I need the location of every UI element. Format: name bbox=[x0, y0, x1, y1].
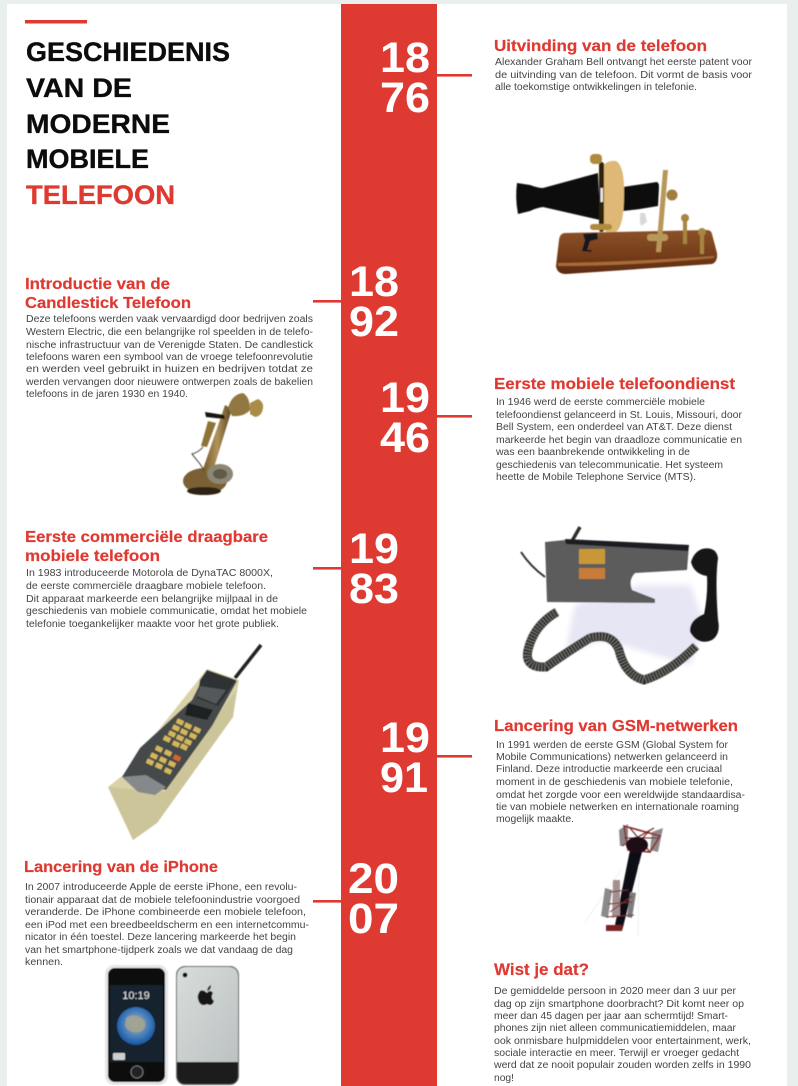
body wist je dat: werd dat ze nooit populair zouden worden zelfs in 1990 bbox=[493, 1060, 752, 1071]
heading 1876: Uitvinding van de telefoon bbox=[494, 38, 707, 55]
year 1983 bbox=[349, 525, 399, 613]
body 1983 bbox=[26, 568, 308, 630]
connector 1876 bbox=[437, 74, 472, 77]
body wist je dat: nog! bbox=[494, 1073, 514, 1084]
panel: 1983 DynaTAC bbox=[25, 525, 399, 840]
icon: iPhone front: 10:19 bbox=[122, 990, 150, 1002]
icon: GSM tower bbox=[585, 824, 663, 937]
body 1991: moment in de geschiedenis van mobiele telefonie, bbox=[496, 777, 733, 788]
icon: Bell telephone bbox=[516, 154, 717, 274]
heading 1892: Introductie van de bbox=[25, 276, 170, 293]
body 1991: mogelijk maakte. bbox=[496, 814, 574, 825]
body wist je dat: phones zijn niet alleen communicatiemiddelen, maar bbox=[494, 1023, 737, 1034]
body 1946: markeerde het begin van draadloze communicatie en bbox=[496, 435, 742, 446]
year 1892: 18 bbox=[349, 258, 399, 306]
body wist je dat: sociale interactie en meer. Terwijl er vroeger gedacht bbox=[494, 1048, 739, 1059]
connector 1892 bbox=[313, 300, 341, 303]
connector 1991 bbox=[437, 755, 472, 758]
year 1983: 19 bbox=[349, 525, 399, 573]
body 1892: werden vervangen door nieuwere ontwerpen zoals de bakelien bbox=[25, 377, 313, 388]
year 1946: 46 bbox=[380, 414, 430, 462]
body 1983: telefonie toegankelijker maakte voor het grote publiek. bbox=[26, 619, 279, 630]
body 1946: heette de Mobile Telephone Service (MTS). bbox=[496, 472, 696, 483]
icon: iPhone front bbox=[105, 965, 168, 1085]
body 1876: de uitvinding van de telefoon. Dit vormt de basis voor bbox=[495, 70, 753, 81]
year 1991 bbox=[380, 714, 430, 802]
red timeline bar bbox=[341, 4, 437, 1086]
body 1876: alle toekomstige ontwikkelingen in telefonie. bbox=[495, 82, 697, 93]
icon: candlestick telephone bbox=[183, 393, 263, 495]
body 1946: telefoondienst gelanceerd in St. Louis, Missouri, door bbox=[496, 410, 743, 421]
panel: wist je dat bbox=[493, 961, 752, 1084]
body 1946: Bell System, een onderdeel van AT&T. Deze dienst bbox=[496, 422, 732, 433]
year 1946 bbox=[380, 374, 430, 462]
year 1876 bbox=[380, 34, 430, 122]
year 1876: 76 bbox=[380, 74, 430, 122]
body 1991: omdat het zorgde voor een wereldwijde standaardisa- bbox=[496, 790, 745, 801]
body 1946: geschiedenis van telecommunicatie. Het systeem bbox=[496, 460, 723, 471]
body wist je dat bbox=[493, 986, 752, 1084]
body wist je dat: De gemiddelde persoon in 2020 meer dan 3 uur per bbox=[494, 986, 737, 997]
body 2007: tionair apparaat dat de mobiele telefoonindustrie voorgoed bbox=[25, 895, 300, 906]
body 1892 bbox=[25, 314, 314, 400]
year 2007: 20 bbox=[348, 855, 399, 903]
body 1983: Dit apparaat markeerde een belangrijke mijlpaal in de bbox=[26, 594, 279, 605]
year 1983: 83 bbox=[349, 565, 399, 613]
body 2007 bbox=[25, 882, 309, 968]
year 1892: 92 bbox=[349, 298, 399, 346]
heading 1892 bbox=[25, 276, 191, 312]
panel: 2007 iPhone bbox=[24, 855, 399, 1085]
body 2007: van het smartphone-tijdperk zoals we dat vandaag de dag bbox=[25, 945, 293, 956]
connector 1946 bbox=[437, 415, 472, 418]
title: GESCHIEDENIS bbox=[26, 37, 230, 67]
connector 2007 bbox=[313, 900, 341, 903]
heading 1892: Candlestick Telefoon bbox=[25, 295, 191, 312]
body 1991: tie van mobiele netwerken en internationale roaming bbox=[496, 802, 739, 813]
heading 1991: Lancering van GSM-netwerken bbox=[494, 718, 738, 735]
body wist je dat: ook onmisbare hulpmiddelen voor entertainment, werk, bbox=[494, 1036, 751, 1047]
heading wist je dat: Wist je dat? bbox=[494, 961, 589, 979]
heading 1946: Eerste mobiele telefoondienst bbox=[494, 376, 735, 393]
body 1892: Western Electric, die een belangrijke rol speelden in de telefo- bbox=[26, 327, 313, 338]
title: VAN DE bbox=[26, 73, 132, 103]
year 1892 bbox=[349, 258, 399, 346]
body 2007: veranderde. De iPhone combineerde een mobiele telefoon, bbox=[25, 907, 306, 918]
body 2007: In 2007 introduceerde Apple de eerste iPhone, een revolu- bbox=[25, 882, 297, 893]
connector 1983 bbox=[313, 567, 341, 570]
heading 2007: Lancering van de iPhone bbox=[24, 859, 218, 876]
body 1991 bbox=[496, 740, 745, 825]
body 1946: In 1946 werd de eerste commerciële mobiele bbox=[496, 397, 706, 408]
body 2007: nicator in één toestel. Deze lancering markeerde het begin bbox=[25, 932, 296, 943]
body 1946: was een baanbrekende ontwikkeling in de bbox=[495, 447, 691, 458]
title accent line bbox=[25, 20, 87, 24]
panel: 1876 uitvinding bbox=[380, 34, 753, 274]
body wist je dat: dag op zijn smartphone doorbracht? Dit komt neer op bbox=[494, 999, 745, 1010]
body 1983: de eerste commerciële draagbare mobiele telefoon. bbox=[26, 581, 266, 592]
heading 1983: mobiele telefoon bbox=[25, 548, 160, 565]
title block bbox=[25, 20, 230, 210]
body 1983: In 1983 introduceerde Motorola de DynaTAC 8000X, bbox=[26, 568, 273, 579]
year 1876: 18 bbox=[380, 34, 430, 82]
body 1946 bbox=[495, 397, 743, 483]
icon: Motorola DynaTAC bbox=[108, 645, 261, 840]
year 1946: 19 bbox=[380, 374, 430, 422]
panel: 1946 mobile service bbox=[380, 374, 743, 680]
panel: 1991 GSM bbox=[380, 714, 745, 937]
body 1892: nische infrastructuur van de Verenigde Staten. De candlestick bbox=[26, 340, 313, 351]
body 2007: een iPod met een breedbeeldscherm en een internetcommu- bbox=[25, 920, 309, 931]
body 1991: Finland. Deze introductie markeerde een cruciaal bbox=[496, 764, 722, 775]
heading 1983: Eerste commerciële draagbare bbox=[25, 529, 268, 546]
title: MOBIELE bbox=[26, 144, 149, 174]
body 1991: Mobile Communications) netwerken gelanceerd in bbox=[496, 752, 728, 763]
year 2007: 07 bbox=[348, 895, 399, 943]
body 1892: telefoons waren een symbool van de vroege telefoonrevolutie bbox=[26, 352, 314, 363]
keypad bbox=[146, 718, 201, 775]
body 1876 bbox=[495, 57, 753, 93]
year 1991: 91 bbox=[380, 754, 428, 802]
icon: car telephone with coiled cord bbox=[521, 527, 719, 680]
year 2007 bbox=[348, 855, 399, 943]
body 1991: In 1991 werden de eerste GSM (Global System for bbox=[496, 740, 729, 751]
title bbox=[26, 37, 230, 210]
year 1991: 19 bbox=[380, 714, 430, 762]
title: TELEFOON bbox=[26, 180, 175, 210]
body 1892: Deze telefoons werden vaak vervaardigd door bedrijven zoals bbox=[26, 314, 313, 325]
body 2007: kennen. bbox=[25, 957, 63, 968]
body wist je dat: meer dan 45 dagen per jaar aan schermtijd! Smart- bbox=[494, 1011, 728, 1022]
body 1876: Alexander Graham Bell ontvangt het eerste patent voor bbox=[495, 57, 753, 68]
icon: iPhone back bbox=[176, 966, 239, 1085]
title: MODERNE bbox=[26, 109, 170, 139]
body 1892: en werden veel gebruikt in huizen en bedrijven totdat ze bbox=[26, 364, 314, 375]
heading 1983 bbox=[25, 529, 268, 565]
body 1892: telefoons in de jaren 1930 en 1940. bbox=[26, 389, 188, 400]
panel: 1892 candlestick bbox=[25, 258, 399, 495]
body 1983: geschiedenis van mobiele communicatie, omdat het mobiele bbox=[26, 606, 308, 617]
